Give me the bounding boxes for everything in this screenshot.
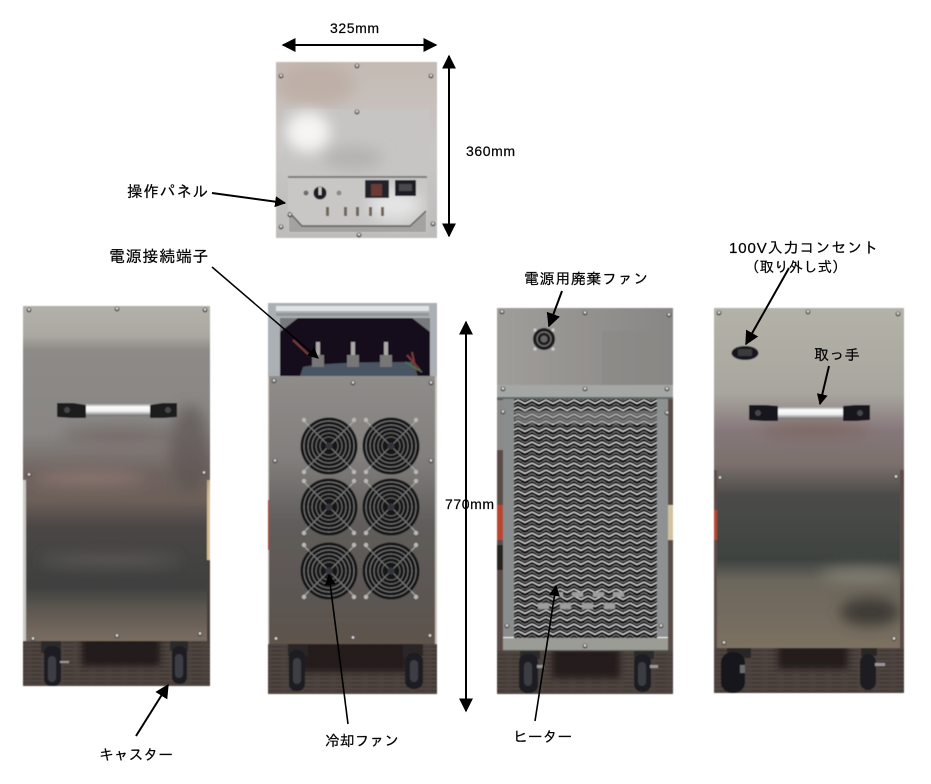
- icon: exhaust fan: [533, 328, 555, 351]
- callout: heater: [513, 586, 572, 746]
- icon: right caster: [403, 644, 423, 689]
- callout: caster: [99, 685, 173, 764]
- icon: left caster: [519, 651, 544, 693]
- photo: right side with inlet and handle: [714, 308, 904, 693]
- dimension: height 770mm: 770mm: [445, 496, 495, 512]
- icon: right caster: [860, 648, 885, 690]
- callout: 100V inlet: [729, 240, 879, 344]
- icon: left caster: [41, 641, 69, 686]
- callout: power terminal: 電源接続端子: [109, 248, 209, 266]
- callout: power exhaust fan: 電源用廃棄ファン: [524, 271, 649, 288]
- photo: rear view with cooling fans: [268, 303, 437, 694]
- callout: caster: キャスター: [99, 748, 173, 764]
- dimension: width 325mm: 325mm: [330, 20, 380, 36]
- callout: cooling fan: 冷却ファン: [325, 734, 399, 750]
- callout: power terminal: [109, 248, 318, 358]
- photo: left side with handle and casters: [23, 306, 210, 686]
- callout: power exhaust fan: [524, 271, 649, 326]
- callout: handle: [814, 347, 860, 404]
- callout: operation panel: 操作パネル: [127, 184, 209, 201]
- callout: cooling fan: [325, 575, 399, 750]
- dimension: depth 360mm: 360mm: [466, 143, 516, 159]
- icon: right caster: [170, 641, 188, 684]
- icon: right caster: [634, 651, 658, 692]
- photo: front view with heater mesh: [497, 308, 673, 694]
- callout: handle: 取っ手: [814, 347, 860, 364]
- icon: left caster: [721, 648, 751, 693]
- icon: power inlet: [732, 346, 758, 360]
- callout: 100V inlet: （取り外し式）: [745, 260, 846, 276]
- icon: left caster: [288, 644, 308, 691]
- callout: 100V inlet: 100V入力コンセント: [729, 240, 879, 257]
- callout: heater: ヒーター: [513, 730, 572, 746]
- callout: operation panel: [127, 184, 285, 203]
- photo: top view with operation panel: [275, 62, 437, 238]
